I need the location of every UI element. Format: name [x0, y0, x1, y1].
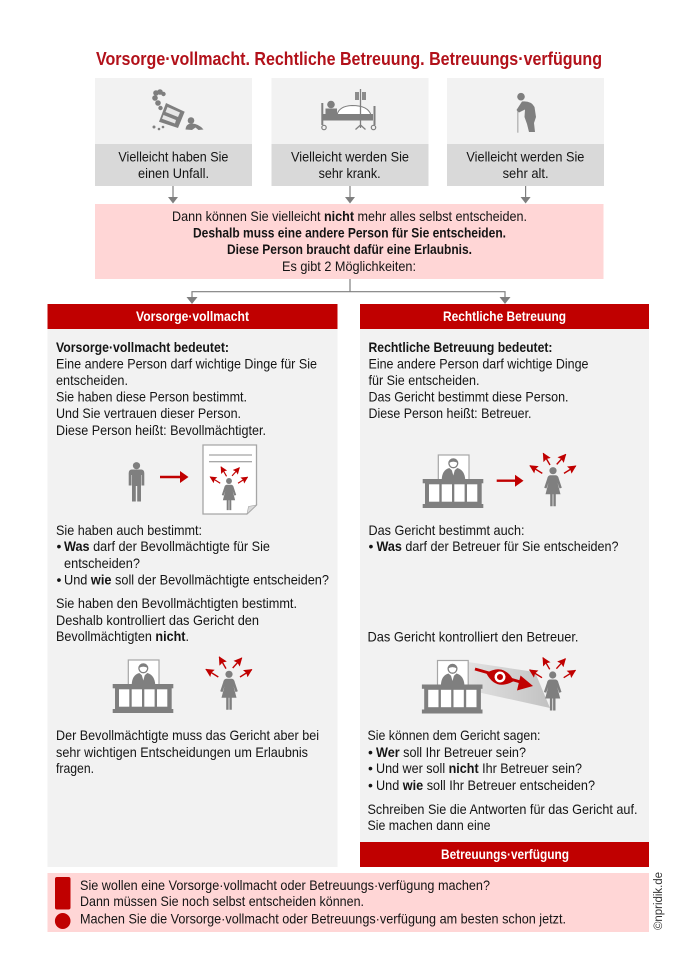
text: no court control: Bevollmächtigten nicht. — [56, 628, 189, 644]
text: what was decided: • — [56, 572, 62, 588]
text: no court control: Sie haben den Bevollmächtigten bestimmt. — [56, 595, 297, 611]
text: meaning: Rechtliche Betreuung bedeutet: — [368, 339, 552, 355]
panel: accident — [95, 78, 252, 186]
text: advice: Sie wollen eine Vorsorge·vollmacht oder Betreuungs·verfügung machen? — [80, 877, 490, 893]
text: write down answers — [368, 801, 638, 833]
callout: consequence — [95, 204, 604, 279]
text: what you can tell the court: • — [368, 760, 373, 776]
heading: Betreuungs-verfügung: Betreuungs·verfügung — [441, 846, 569, 862]
text: what you can tell the court: Und wie soll Ihr Betreuer entscheiden? — [376, 777, 595, 793]
heading: Betreuungs-verfügung — [360, 842, 649, 867]
text: accident: einen Unfall. — [138, 165, 209, 181]
text: what was decided: entscheiden? — [64, 555, 140, 571]
panel: illness — [272, 78, 428, 186]
text: meaning: Und Sie vertrauen dieser Person. — [56, 405, 241, 421]
icon: court appoints carer — [423, 453, 576, 508]
text: old age: sehr alt. — [503, 165, 549, 181]
panel: Rechtliche Betreuung — [360, 304, 649, 867]
text: what you can tell the court: • — [368, 777, 373, 793]
arrow: illness down — [345, 186, 355, 204]
text: permission — [56, 727, 319, 776]
text: meaning: Sie haben diese Person bestimmt. — [56, 389, 247, 405]
callout: consequence: Dann können Sie vielleicht nicht mehr alles selbst entscheiden. — [172, 208, 527, 224]
text: advice: Dann müssen Sie noch selbst entscheiden können. — [80, 893, 364, 909]
text: advice: Machen Sie die Vorsorge·vollmacht oder Betreuungs·verfügung am besten schon jetzt. — [80, 910, 566, 926]
icon: exclamation mark — [55, 877, 70, 929]
panel: Vorsorge-vollmacht — [48, 304, 338, 867]
text: permission: fragen. — [56, 760, 94, 776]
copyright: ©npridik.de — [653, 872, 665, 930]
text: meaning — [368, 339, 589, 421]
text: court controls: Das Gericht kontrolliert den Betreuer. — [368, 629, 578, 645]
text: what you can tell the court: • — [368, 744, 373, 760]
title: Vorsorge·vollmacht. Rechtliche Betreuung. Betreuungs·verfügung — [96, 49, 602, 69]
arrow: accident down — [168, 186, 178, 204]
text: court also decides — [368, 522, 619, 554]
text: no court control: Deshalb kontrolliert das Gericht den — [56, 612, 259, 628]
text: what was decided: Was darf der Bevollmächtigte für Sie — [64, 538, 270, 554]
text: illness: sehr krank. — [319, 165, 381, 181]
text: what you can tell the court — [368, 727, 595, 793]
text: court also decides: Das Gericht bestimmt auch: — [368, 522, 524, 538]
text: what was decided: Und wie soll der Bevollmächtigte entscheiden? — [64, 572, 329, 588]
icon: elderly person — [516, 93, 536, 133]
text: no court control — [56, 595, 297, 644]
icon: hospital bed — [322, 89, 376, 130]
text: write down answers: Sie machen dann eine — [368, 817, 491, 833]
text: write down answers: Schreiben Sie die Antworten für das Gericht auf. — [368, 801, 638, 817]
text: illness: Vielleicht werden Sie — [291, 148, 409, 164]
text: court also decides: Was darf der Betreuer für Sie entscheiden? — [376, 538, 619, 554]
icon: court and attorney — [113, 657, 252, 713]
text: meaning: Das Gericht bestimmt diese Person. — [368, 389, 568, 405]
icon: court watches carer — [422, 658, 575, 714]
callout: consequence: Es gibt 2 Möglichkeiten: — [282, 258, 416, 274]
text: old age: Vielleicht werden Sie — [466, 148, 585, 164]
text: meaning: Vorsorge·vollmacht bedeutet: — [56, 339, 229, 355]
text: what you can tell the court: Sie können dem Gericht sagen: — [368, 727, 540, 743]
text: what was decided: Sie haben auch bestimmt: — [56, 522, 202, 538]
text: court also decides: • — [368, 538, 374, 554]
text: meaning: Diese Person heißt: Bevollmächtigter. — [56, 422, 266, 438]
heading: Rechtliche Betreuung — [360, 304, 649, 329]
arrow: old age down — [521, 186, 531, 204]
text: permission: sehr wichtigen Entscheidungen um Erlaubnis — [56, 744, 308, 760]
text: old age — [466, 148, 585, 181]
text: accident — [118, 148, 229, 181]
text: what you can tell the court: Und wer soll nicht Ihr Betreuer sein? — [376, 760, 582, 776]
text: what was decided — [56, 522, 329, 588]
text: meaning: Diese Person heißt: Betreuer. — [368, 405, 532, 421]
text: meaning: für Sie entscheiden. — [368, 372, 480, 388]
callout: act now — [48, 873, 649, 932]
text: meaning: Eine andere Person darf wichtige Dinge für Sie — [56, 356, 317, 372]
text: meaning — [56, 339, 317, 438]
text: advice — [80, 877, 566, 926]
text: meaning: Eine andere Person darf wichtige Dinge — [368, 356, 589, 372]
text: meaning: entscheiden. — [56, 372, 128, 388]
icon: overturned car — [152, 89, 204, 130]
text: what was decided: • — [56, 538, 62, 554]
heading: Vorsorge-vollmacht — [48, 304, 338, 329]
text: accident: Vielleicht haben Sie — [118, 148, 229, 164]
panel: old age — [447, 78, 604, 186]
text: illness — [291, 148, 409, 181]
arrow: split into two options — [186, 279, 510, 304]
callout: consequence: Deshalb muss eine andere Person für Sie entscheiden. — [193, 224, 506, 240]
heading: Rechtliche Betreuung: Rechtliche Betreuung — [443, 308, 566, 324]
text: what you can tell the court: Wer soll Ihr Betreuer sein? — [376, 744, 526, 760]
icon: person gives power of attorney document — [129, 445, 256, 514]
heading: Vorsorge-vollmacht: Vorsorge·vollmacht — [136, 308, 249, 324]
text: permission: Der Bevollmächtigte muss das Gericht aber bei — [56, 727, 319, 743]
callout: consequence: Diese Person braucht dafür eine Erlaubnis. — [227, 241, 472, 257]
